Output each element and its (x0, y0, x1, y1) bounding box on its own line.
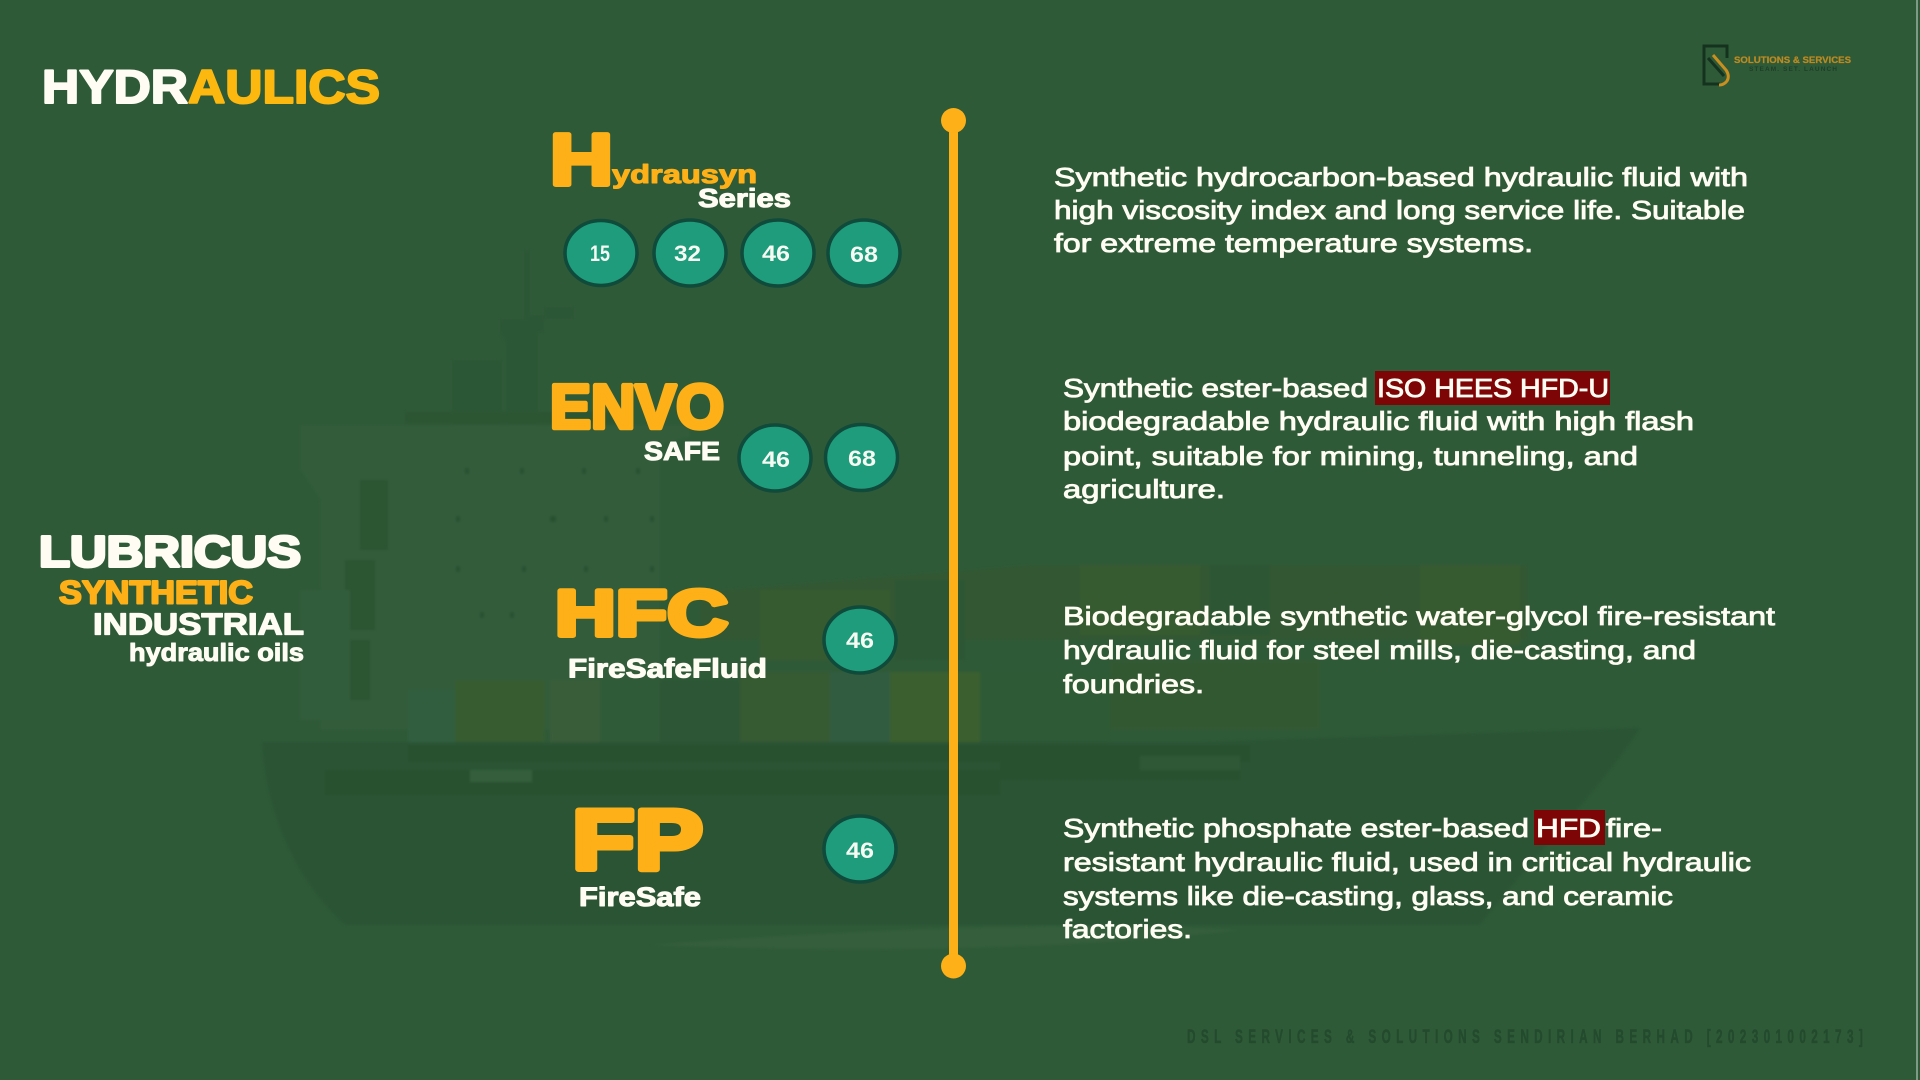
grade 46: 46 (762, 241, 790, 266)
left label: Lubricus: INDUSTRIAL (93, 606, 304, 642)
highlight: ISO HEES HFD-U: ISO HEES HFD-U (1377, 373, 1609, 403)
logo: Envo Safe: SAFE (644, 436, 720, 466)
containers upper (700, 565, 1528, 640)
mast (500, 250, 574, 433)
left label: Lubricus: SYNTHETIC (59, 574, 253, 610)
hull (262, 728, 1640, 925)
description: Envo Safe: biodegradable hydraulic fluid with high flash (1063, 406, 1694, 436)
logo: HFC FireSafeFluid: HFC (555, 576, 728, 650)
grade 46: 46 (846, 838, 874, 863)
description: HFC (1063, 601, 1776, 699)
grade 32 (654, 220, 726, 286)
description: Envo Safe: agriculture. (1063, 474, 1225, 504)
title: HYDR (42, 60, 188, 113)
grade 46: 46 (762, 447, 790, 472)
icon: S outline (1704, 46, 1727, 84)
grade 46 (739, 425, 811, 491)
logo: FP FireSafe: FP (572, 793, 703, 888)
grade 46 (742, 220, 814, 286)
logo: Hydrausyn Series: ydrausyn (612, 159, 757, 189)
left label: Lubricus: hydraulic oils (129, 639, 304, 667)
description: FP: Synthetic phosphate ester-based (1063, 813, 1529, 843)
faded container ship background (262, 250, 1640, 949)
logo: FP FireSafe: FireSafe (579, 882, 701, 912)
description: FP: fire- (1606, 813, 1662, 843)
grade 32: 32 (674, 241, 701, 266)
containers lower (408, 690, 458, 745)
title: AULICS (188, 60, 380, 113)
grade 15: 15 (590, 241, 610, 266)
description: FP: factories. (1063, 914, 1192, 944)
description: Envo Safe: Synthetic ester-based (1063, 373, 1368, 403)
grade 68 (828, 220, 900, 286)
grade 46 (824, 607, 896, 673)
footer company registration: DSL SERVICES & SOLUTIONS SENDIRIAN BERHAD [202301002173] (1187, 1027, 1863, 1048)
product: Envo Safe (550, 373, 898, 491)
logo: HFC FireSafeFluid: FireSafeFluid (568, 654, 767, 684)
logo text: SOLUTIONS & SERVICES (1734, 55, 1851, 66)
highlight: HFD (1534, 810, 1605, 845)
logo: Envo Safe: ENVO (550, 373, 724, 442)
grade 68 (826, 424, 898, 490)
left label: Lubricus (39, 528, 304, 667)
title (42, 60, 380, 113)
logo: FP FireSafe (572, 793, 703, 912)
logo: Hydrausyn Series (550, 120, 791, 213)
description: HFC: Biodegradable synthetic water-glycol fire-resistant (1063, 601, 1776, 631)
description: FP: systems like die-casting, glass, and ceramic (1063, 881, 1673, 911)
logo (1704, 46, 1851, 85)
logo tagline: STEAM. SET. LAUNCH (1749, 66, 1837, 73)
description: Envo Safe (1063, 371, 1694, 504)
logo: Hydrausyn Series: Series (698, 183, 791, 213)
left label: Lubricus: LUBRICUS (39, 528, 301, 576)
water (650, 926, 1240, 949)
grade 46: 46 (846, 628, 874, 653)
grade 68: 68 (850, 242, 878, 267)
description: FP (1063, 810, 1751, 944)
grade 15 (565, 220, 637, 286)
description: Hydrausyn: Synthetic hydrocarbon-based hydraulic fluid with (1054, 162, 1748, 192)
description: HFC: hydraulic fluid for steel mills, die-casting, and (1063, 635, 1696, 665)
description: Hydrausyn: high viscosity index and long service life. Suitable (1054, 195, 1745, 225)
description: Envo Safe: point, suitable for mining, tunneling, and (1063, 441, 1638, 471)
right edge strip (1916, 0, 1918, 1080)
superstructure (300, 425, 690, 730)
description: Hydrausyn: for extreme temperature systems. (1054, 228, 1533, 258)
vertical timeline (941, 108, 966, 978)
product: Hydrausyn (550, 120, 900, 286)
description: Hydrausyn (1054, 162, 1748, 258)
logo: Hydrausyn Series: H (550, 120, 613, 200)
grade 46 (824, 816, 896, 882)
description: FP: resistant hydraulic fluid, used in critical hydraulic (1063, 847, 1751, 877)
product: HFC (555, 576, 896, 684)
logo: HFC FireSafeFluid (555, 576, 767, 684)
description: HFC: foundries. (1063, 669, 1204, 699)
highlight: HFD: HFD (1536, 813, 1601, 843)
grade 68: 68 (848, 446, 876, 471)
product: FP (572, 793, 896, 912)
windows (456, 468, 654, 618)
icon: gold swoosh (1713, 55, 1728, 85)
